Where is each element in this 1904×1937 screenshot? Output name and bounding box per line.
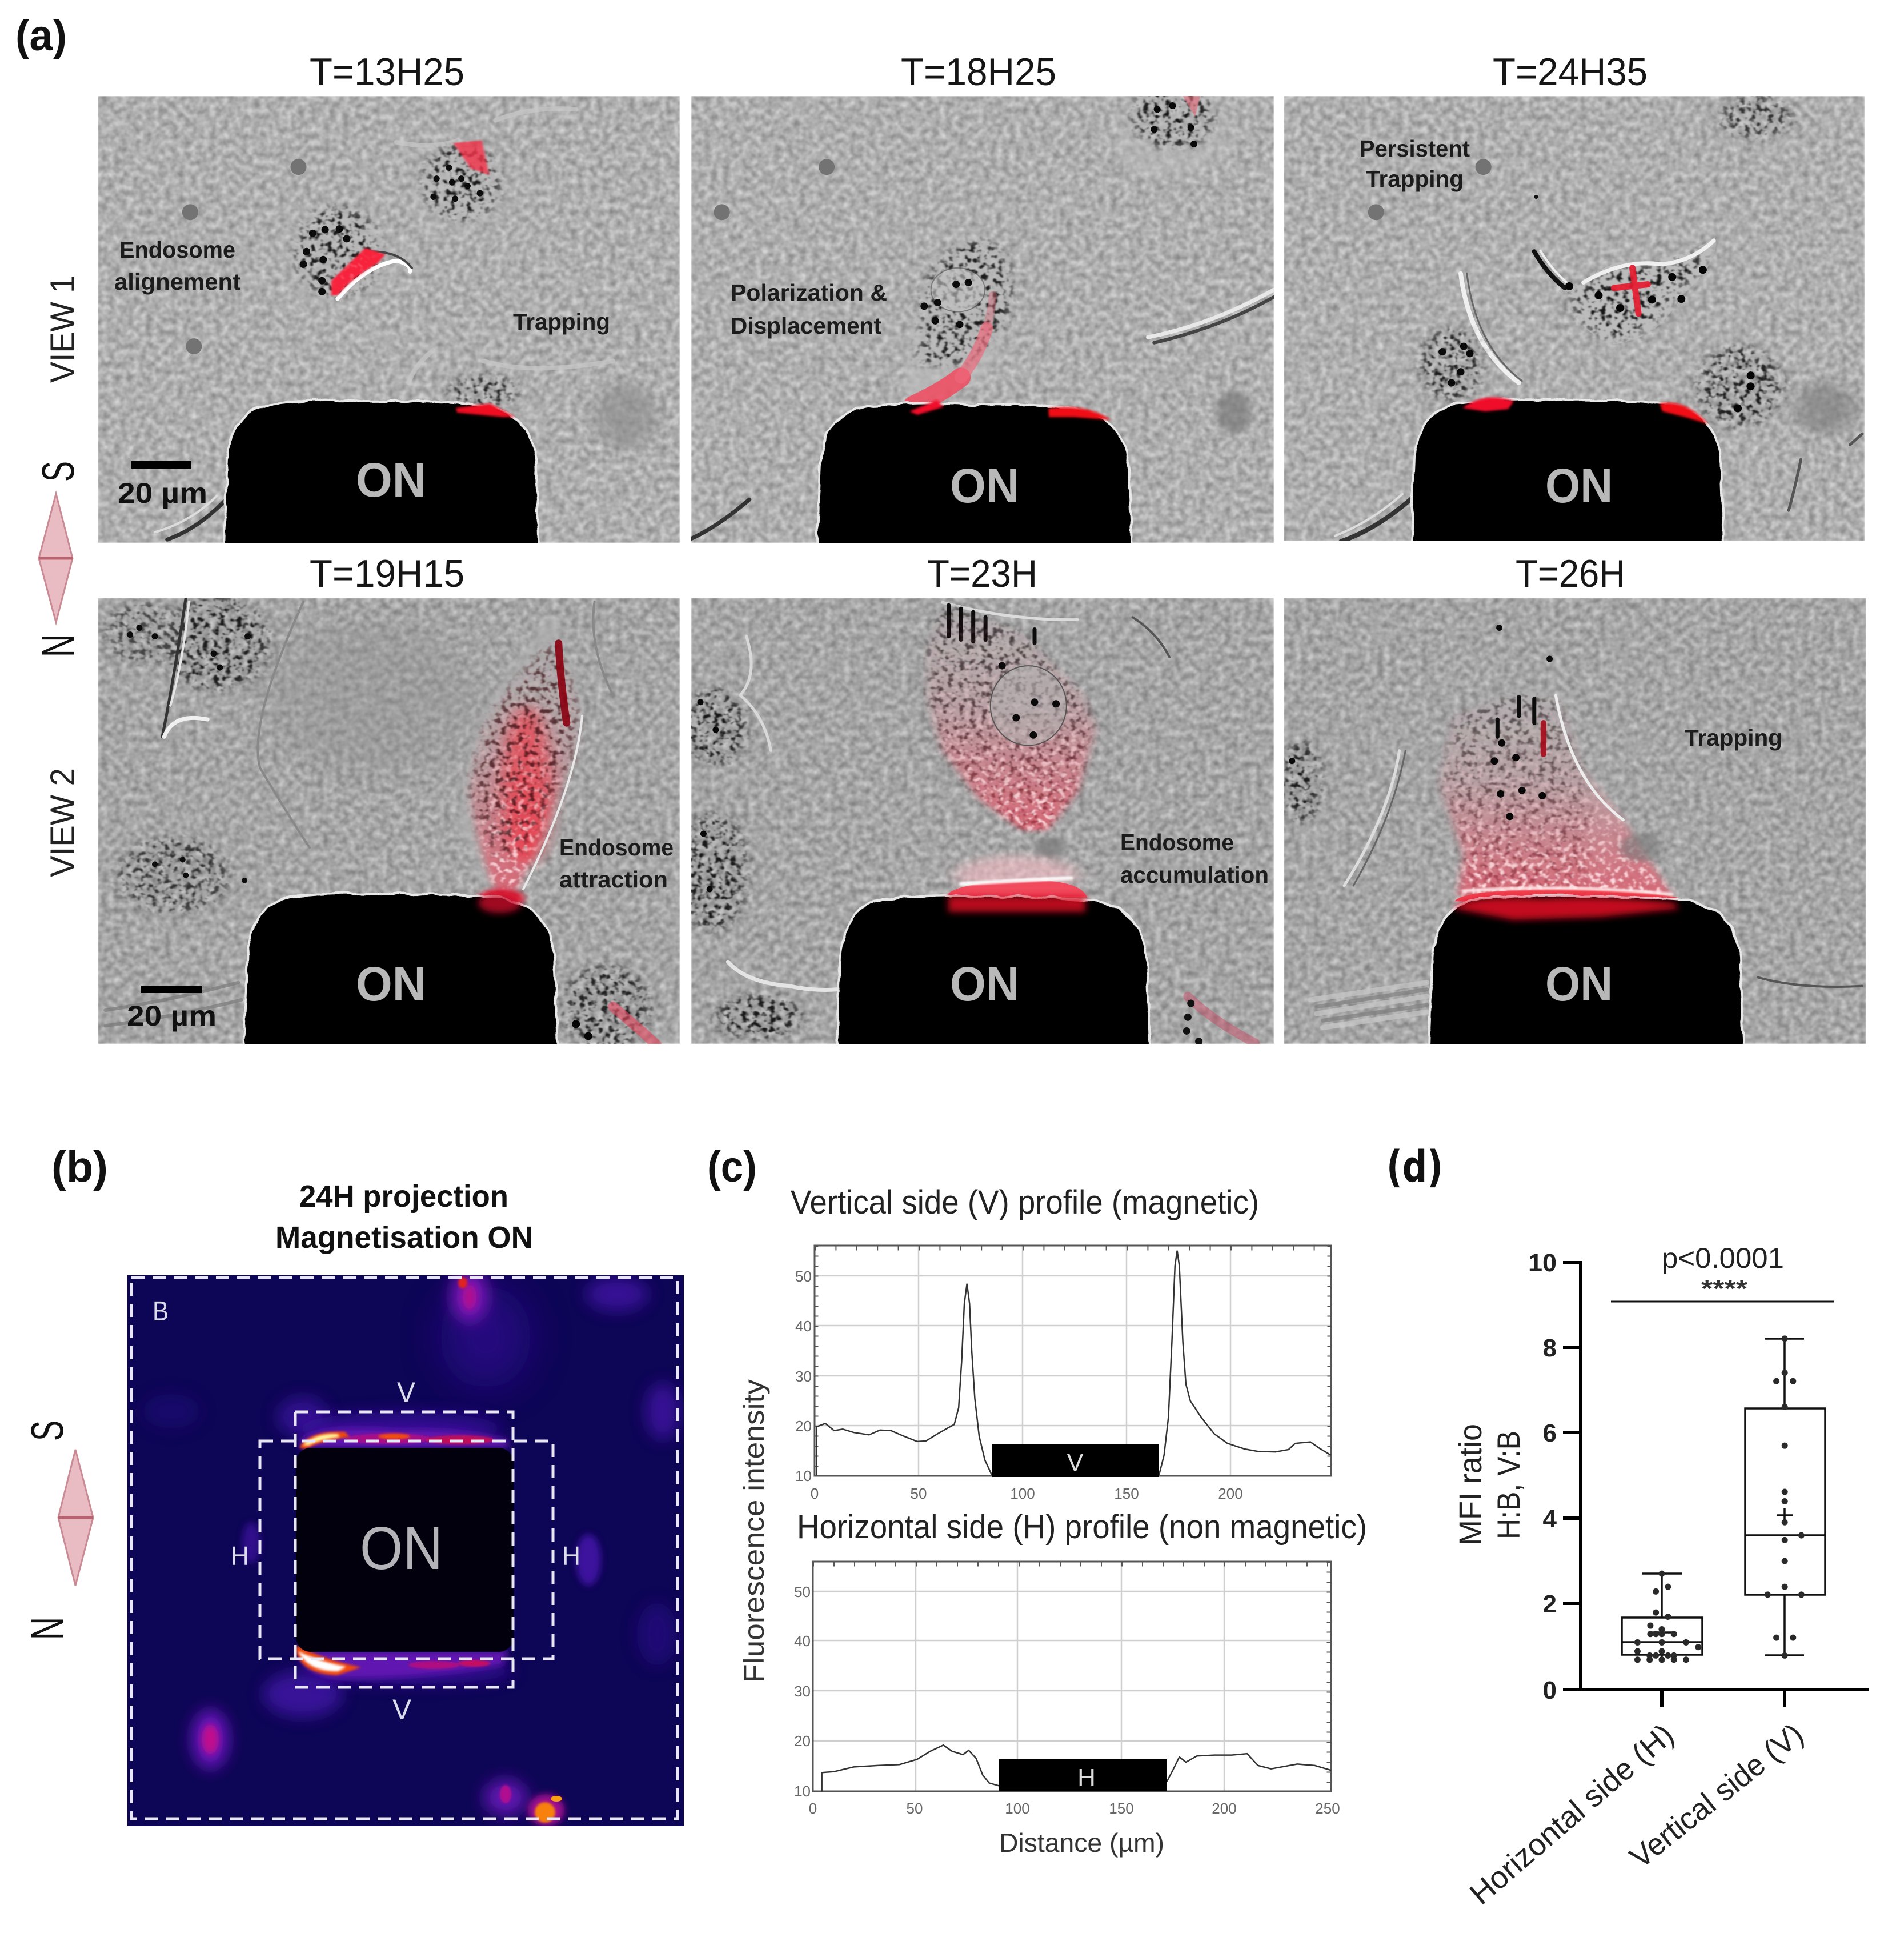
cell: central cell with red cross — [1534, 237, 1716, 345]
x ticks: 250 — [1315, 1800, 1340, 1817]
black bar V — [992, 1444, 1159, 1477]
side label: VIEW 2: VIEW 2 — [43, 768, 82, 877]
diffuse purple haze — [143, 1277, 680, 1717]
stars: **** — [1701, 1275, 1748, 1303]
cell: red attracted cell — [458, 612, 582, 893]
x ticks: 100 — [1010, 1485, 1035, 1502]
annotation: Persistent Trapping: Trapping — [1366, 166, 1464, 192]
y ticks: 40 — [795, 1318, 812, 1335]
panel label (b): (b) — [51, 1143, 108, 1191]
heading: T=13H25: T=13H25 — [310, 50, 464, 94]
y axis title: MFI ratio — [1452, 1424, 1488, 1546]
label H right: H — [562, 1541, 580, 1571]
heading: horizontal side profile: Horizontal side (H) profile (non magnetic) — [797, 1508, 1367, 1546]
label ON: ON — [1545, 957, 1613, 1011]
red band at tip — [945, 856, 1087, 898]
y axis label: Fluorescence intensity: Fluorescence intensity — [738, 1379, 770, 1683]
side label: VIEW 1: VIEW 1 — [43, 275, 82, 383]
panel: micrograph T=13H25 — [98, 96, 680, 546]
chart: vertical side profile — [795, 1246, 1331, 1502]
side label: S: S — [22, 1420, 73, 1441]
cell: red central cell — [1439, 689, 1672, 896]
x axis label: Distance: Distance (µm) — [999, 1828, 1164, 1858]
y ticks: 20 — [794, 1732, 811, 1750]
dashed ROI: background B — [131, 1278, 678, 1819]
hot spots — [192, 1270, 564, 1826]
red glow in tip — [1454, 897, 1679, 920]
cell: top right cell — [1115, 77, 1230, 179]
label ON: ON — [1545, 459, 1613, 513]
bar label V: V — [1067, 1448, 1084, 1476]
heading: T=24H35: T=24H35 — [1493, 50, 1648, 94]
label ON: ON — [356, 453, 426, 507]
cell: upper endosome cell — [418, 141, 504, 228]
heading: T=19H15: T=19H15 — [310, 552, 464, 595]
y ticks: 50 — [794, 1583, 811, 1600]
y ticks: 10 — [795, 1467, 812, 1484]
bar label H: H — [1077, 1764, 1096, 1792]
category label: vertical side: Vertical side (V) — [1624, 1717, 1810, 1875]
dashed ROI: vertical side V — [295, 1412, 513, 1687]
label V top: V — [397, 1376, 416, 1408]
annotation: Endosome accumulation: Endosome — [1120, 829, 1234, 855]
black bar H — [999, 1759, 1167, 1791]
side label: S: S — [33, 461, 83, 482]
y tick labels: 4 — [1543, 1505, 1557, 1533]
label ON: ON — [356, 957, 426, 1011]
x ticks: 50 — [907, 1800, 923, 1817]
x ticks: 0 — [811, 1485, 819, 1502]
panel: fluorescence projection heatmap — [127, 1270, 684, 1826]
x ticks: 50 — [911, 1485, 927, 1502]
x ticks: 150 — [1114, 1485, 1139, 1502]
cell: bottom right red cell — [563, 965, 656, 1048]
heading: 24H projection Magnetisation ON: 24H projection — [299, 1179, 508, 1214]
heading: T=23H: T=23H — [927, 552, 1037, 595]
annotation: Trapping: Trapping — [1685, 725, 1782, 751]
y ticks: 20 — [795, 1418, 812, 1435]
profile curve — [822, 1745, 1331, 1791]
x ticks: 150 — [1109, 1800, 1134, 1817]
cell: left endosome cell with red alignment — [288, 206, 412, 305]
annotation: Polarization & Displacement — [731, 279, 887, 339]
annotation: Polarization & Displacement: Polarization & — [731, 279, 887, 306]
significance bar — [1611, 1300, 1834, 1303]
y tick labels: 2 — [1543, 1590, 1557, 1618]
cell at magnet edge — [449, 375, 517, 409]
icon: magnetic axis diamond — [39, 494, 73, 622]
red accumulation at tip — [456, 403, 515, 417]
x ticks: 100 — [1005, 1800, 1030, 1817]
y tick labels — [1528, 1249, 1557, 1704]
axes — [1563, 1261, 1869, 1707]
annotation: Endosome attraction: Endosome — [559, 834, 674, 861]
annotation: Endosome alignement — [114, 237, 240, 295]
x ticks — [811, 1485, 1243, 1502]
magnet tip — [1429, 896, 1743, 1047]
red glow at tip — [478, 893, 522, 913]
red accumulation at tip — [1462, 397, 1708, 424]
cell: lower right red cell — [1187, 996, 1255, 1043]
y tick labels: 6 — [1543, 1419, 1557, 1447]
panel label (c): (c) — [707, 1143, 757, 1191]
scale bar 20 um — [118, 461, 207, 509]
label ON: ON — [360, 1515, 443, 1582]
cell: lower left cell — [118, 837, 244, 913]
p value: p<0.0001 — [1662, 1242, 1784, 1274]
annotation: Endosome accumulation: accumulation — [1120, 862, 1269, 888]
scale bar 20 um: 20 µm — [127, 1000, 217, 1032]
panel: micrograph T=19H15 — [98, 597, 680, 1048]
dashed ROI: horizontal side H — [260, 1441, 553, 1659]
category label: horizontal side: Horizontal side (H) — [1464, 1718, 1680, 1911]
annotation: Trapping: Trapping — [513, 309, 610, 335]
icon: magnetic axis diamond — [58, 1450, 93, 1586]
label B: B — [153, 1296, 169, 1327]
label H left: H — [231, 1541, 249, 1571]
scale bar 20 um — [127, 986, 217, 1032]
box: horizontal side — [1622, 1574, 1702, 1660]
red accumulation at tip — [909, 400, 1111, 420]
heading: 24H projection Magnetisation ON — [275, 1179, 533, 1255]
bottom magnetic accumulation — [296, 1646, 508, 1679]
heading: T=26H: T=26H — [1516, 552, 1625, 595]
y ticks: 30 — [794, 1683, 811, 1700]
scale bar 20 um: 20 µm — [118, 477, 207, 509]
y ticks: 50 — [795, 1268, 812, 1285]
annotation: Persistent Trapping: Persistent — [1360, 135, 1470, 162]
y ticks: 10 — [794, 1783, 811, 1800]
magnet tip — [224, 401, 539, 546]
heading: vertical side profile: Vertical side (V) profile (magnetic) — [791, 1184, 1259, 1221]
y ticks: 30 — [795, 1368, 812, 1385]
y ticks — [795, 1268, 812, 1484]
side label: N: N — [33, 634, 83, 657]
chart: horizontal side profile — [794, 1562, 1340, 1817]
y axis title — [1452, 1424, 1526, 1546]
panel label (d): (d) — [1386, 1141, 1443, 1192]
annotation: Endosome attraction: attraction — [559, 866, 668, 893]
chart: box plot MFI ratio — [1452, 1242, 1869, 1911]
annotation: Persistent Trapping — [1360, 135, 1470, 192]
y tick labels: 0 — [1543, 1676, 1557, 1704]
label ON: ON — [950, 459, 1019, 513]
x ticks: 0 — [809, 1800, 817, 1817]
top magnetic accumulation — [299, 1428, 508, 1449]
heading: T=18H25: T=18H25 — [901, 50, 1056, 94]
cell: left cell fragments — [679, 637, 881, 1040]
magnet tip — [1411, 399, 1724, 544]
panel: micrograph T=24H35 — [1284, 95, 1865, 544]
cell: right cell — [1697, 346, 1782, 426]
annotation: Polarization & Displacement: Displacement — [731, 313, 881, 339]
x ticks: 200 — [1218, 1485, 1243, 1502]
annotation: Endosome attraction — [559, 834, 674, 893]
magnet tip — [837, 896, 1150, 1047]
y ticks: 40 — [794, 1632, 811, 1650]
y ticks — [794, 1583, 811, 1800]
side label: N: N — [22, 1617, 73, 1640]
label V bottom: V — [392, 1694, 412, 1726]
cell: left cell with white edge — [1421, 273, 1522, 401]
y tick labels: 10 — [1528, 1249, 1557, 1277]
cell: upper left cell — [105, 597, 270, 737]
profile curve — [817, 1251, 1331, 1476]
panel: micrograph T=26H — [1282, 598, 1866, 1047]
panel: micrograph T=23H — [679, 598, 1274, 1047]
annotation: Endosome alignement: Endosome — [119, 237, 235, 263]
y tick labels: 8 — [1543, 1334, 1557, 1362]
red band at tip — [1454, 888, 1678, 901]
cell: central cell with red endosomes — [927, 602, 1096, 858]
red glow in tip — [948, 896, 1085, 912]
panel label (a): (a) — [15, 11, 67, 60]
data points: vertical side — [1767, 1339, 1801, 1655]
annotation: Endosome alignement: alignement — [114, 269, 240, 295]
y axis title: H:B, V:B — [1490, 1431, 1526, 1539]
magnet tip — [817, 403, 1132, 546]
label ON: ON — [950, 957, 1019, 1011]
panel: micrograph T=18H25 — [685, 77, 1274, 546]
x ticks: 200 — [1212, 1800, 1237, 1817]
box: vertical side — [1745, 1339, 1825, 1655]
magnet tip — [244, 894, 558, 1047]
data points: horizontal side — [1637, 1574, 1698, 1660]
cell: polarized cell with red displacement — [906, 235, 1012, 405]
magnet block — [296, 1448, 514, 1652]
annotation: Endosome accumulation — [1120, 829, 1269, 888]
heading: 24H projection Magnetisation ON: Magnetisation ON — [275, 1220, 533, 1255]
x ticks — [809, 1800, 1340, 1817]
